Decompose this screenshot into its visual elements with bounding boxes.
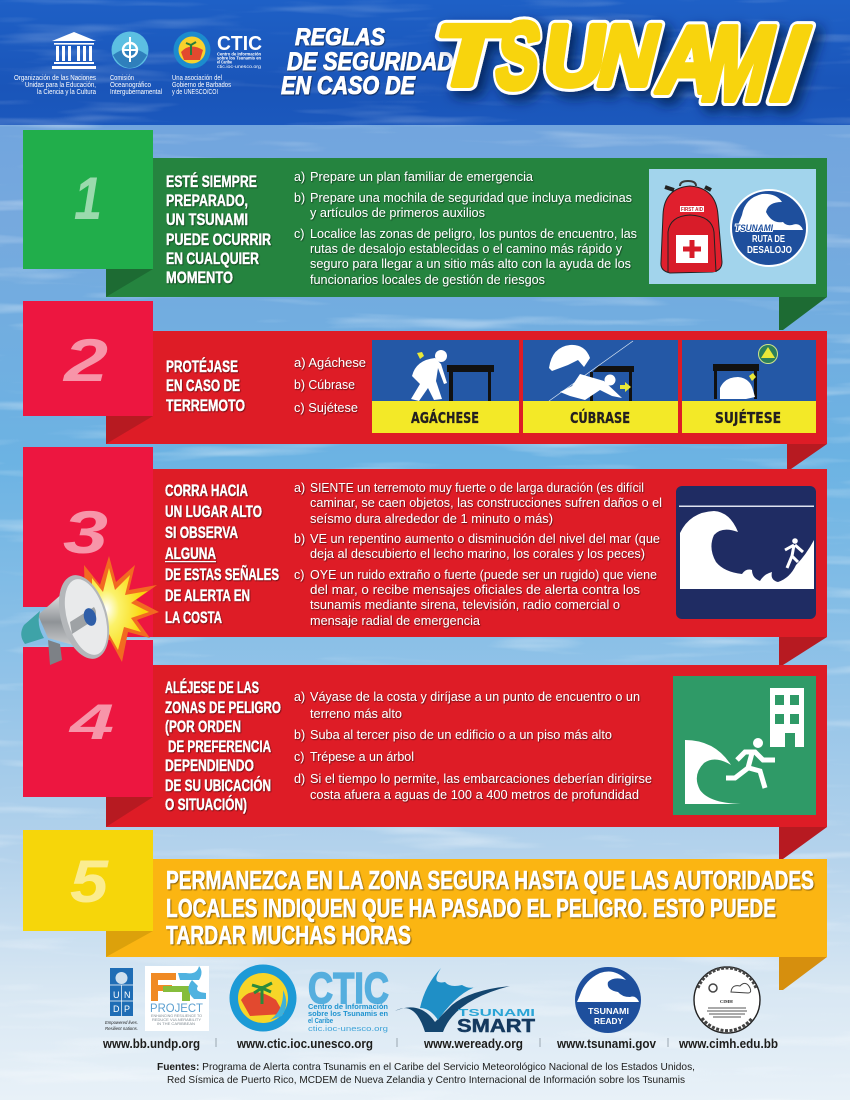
panel 3 heading: CORRA HACIA: [165, 481, 248, 500]
panel 4 heading: DE PREFERENCIA: [168, 737, 271, 756]
panel 1 list: rutas de desalojo establecidas o el camino más rápido y: [310, 242, 623, 256]
logo: CTIC wordmark: CTIC: [308, 964, 389, 1013]
panel 5: stay in safe zone: [23, 830, 827, 990]
logo: CTIC: Centro de Información: [217, 52, 261, 56]
website links: www.ctic.ioc.unesco.org: [236, 1036, 373, 1051]
logo: UNDP: [105, 968, 138, 1031]
partner logos: [105, 964, 760, 1036]
panel 4 list: c): [294, 750, 304, 764]
panel 1 list: y artículos de primeros auxilios: [310, 206, 485, 220]
sources note: Fuentes: Programa de Alerta contra Tsunamis en el Caribe del Servicio Meteorológico Nacional de los Estados Unidos,: [157, 1061, 695, 1073]
panel 4 heading: (POR ORDEN: [165, 717, 241, 736]
UNESCO caption: [14, 75, 96, 96]
panel 3 number square: 3: [63, 499, 108, 566]
website links: www.bb.undp.org: [102, 1036, 200, 1051]
megaphone with burst: [21, 556, 159, 665]
panel 3 heading: DE ESTAS SEÑALES: [165, 564, 279, 584]
panel 4: move away from danger zones: [23, 640, 827, 859]
CTIC caption: y de UNESCO/COI: [172, 89, 218, 96]
title: TSUNAMI: U: [538, 8, 612, 104]
website links: www.tsunami.gov: [556, 1036, 657, 1051]
panel 3 list: a): [294, 481, 305, 495]
CTIC caption: [172, 75, 231, 96]
panel 5 message: [166, 867, 814, 950]
panel 4 list: Suba al tercer piso de un edificio o a un piso más alto: [310, 728, 612, 742]
panel 3: run to high ground: [23, 447, 827, 665]
icon: evacuation route sign: TSUNAMI: [735, 223, 773, 233]
panel 1 list: funcionarios locales de gestión de riesgos: [310, 273, 545, 287]
panel 2: protect in earthquake: [23, 301, 827, 469]
logo: CIMH: CIMH: [720, 999, 733, 1004]
logo: Tsunami Smart: TSUNAMI: [458, 1007, 535, 1019]
hold on step card: [682, 340, 816, 433]
panel 3 banner: [153, 469, 827, 637]
panel 2 heading: PROTÉJASE: [166, 357, 238, 376]
title: TSUNAMI: N: [589, 7, 669, 104]
logo: UNDP: U: [113, 990, 120, 1000]
icon: tsunami warning sign: [676, 486, 816, 619]
panel 4 list: d): [294, 772, 305, 786]
title: TSUNAMI: I: [757, 5, 824, 123]
logo: UNDP: N: [124, 990, 130, 1000]
panel 4 heading: DEPENDIENDO: [165, 756, 254, 775]
panel 1 heading: EN CUALQUIER: [166, 249, 259, 268]
panel 4 list: terreno más alto: [310, 707, 402, 721]
panel 1 list: Prepare una mochila de seguridad que incluya medicinas: [310, 191, 632, 205]
logo: CTIC wordmark: [308, 964, 389, 1033]
logo: ERC project: ENHANCING RESILIENCE TO: [151, 1014, 202, 1018]
panel 2 list: b) Cúbrase: [294, 378, 355, 392]
panel 5 message: TARDAR MUCHAS HORAS: [166, 922, 411, 950]
panel 1 heading: PREPARADO,: [166, 191, 248, 210]
panel 3 list: deja al descubierto el lecho marino, los corales y los peces): [310, 547, 645, 561]
panel 3 list: del mar, o recibe mensajes oficiales de alerta contra los: [310, 583, 640, 597]
cone: [38, 592, 98, 652]
panel 3 heading: [165, 481, 279, 627]
COI caption: Oceanográfico: [110, 82, 151, 89]
panel 4 number square: [23, 640, 153, 797]
panel 1 list: Prepare un plan familiar de emergencia: [310, 170, 533, 184]
title: TSUNAMI: T: [424, 7, 514, 104]
logo: Tsunami Ready: TSUNAMI: [588, 1006, 629, 1016]
title: Reglas de seguridad en caso de: [281, 24, 453, 100]
icon: first aid backpack: [661, 181, 722, 273]
panel 1 list: a): [294, 170, 305, 184]
panel 3 heading: SI OBSERVA: [165, 523, 238, 542]
cover step card: [523, 340, 678, 433]
logo: CTIC wordmark: sobre los Tsunamis en: [308, 1009, 388, 1018]
logo: Comisión Oceanográfica circle: [112, 32, 148, 68]
panel 1 list: c): [294, 227, 304, 241]
logo: Tsunami Ready: [575, 967, 641, 1033]
panel 1 banner: [106, 158, 827, 297]
panel 3 number square: [23, 447, 153, 637]
logo: ERC project: [145, 966, 209, 1031]
logo: CTIC: ctic.ioc-unesco.org: [217, 64, 262, 69]
title: TSUNAMI: S: [490, 3, 547, 109]
title: Reglas de seguridad en caso de: EN CASO DE: [281, 72, 416, 100]
panel 4 number square: 4: [68, 694, 114, 750]
panel 3 list: tsunamis mediante sirena, televisión, radio comercial o: [310, 598, 620, 612]
website links: [102, 1036, 778, 1051]
panel 4 list: [294, 690, 652, 802]
panel 1 heading: PUEDE OCURRIR: [166, 230, 271, 249]
panel 4 banner: [106, 665, 827, 827]
panel 2 number square: [23, 301, 153, 416]
panel 2 banner: [106, 331, 827, 444]
panel 3 list: caminar, se caen objetos, las construcciones sufren daños o el: [310, 496, 662, 510]
logo: UNDP: Resilient nations.: [105, 1026, 138, 1031]
logo: CIMH: [694, 967, 760, 1033]
icon: evacuation route sign: DESALOJO: [747, 245, 792, 256]
title: TSUNAMI: M: [692, 4, 786, 123]
UNESCO caption: la Ciencia y la Cultura: [37, 89, 96, 96]
panel 3 heading: UN LUGAR ALTO: [165, 502, 262, 521]
panel 4 heading: [165, 678, 281, 814]
panel 4 heading: DE SU UBICACIÓN: [165, 776, 271, 795]
panel 2 heading: EN CASO DE: [166, 376, 240, 395]
sources note: [157, 1061, 695, 1086]
panel 4 list: Trépese a un árbol: [310, 750, 414, 764]
logo: CTIC wordmark: Centro de Información: [308, 1002, 388, 1011]
logo: Tsunami Ready: READY: [594, 1016, 623, 1026]
panel 4 list: b): [294, 728, 305, 742]
panel 4 heading: ALÉJESE DE LAS: [165, 678, 259, 697]
title: Reglas de seguridad en caso de: DE SEGURIDAD: [287, 48, 453, 76]
panel 3 list: seísmo dura alrededor de 1 minuto o más): [310, 512, 553, 526]
panel 1 heading: UN TSUNAMI: [166, 210, 248, 229]
title: TSUNAMI: [424, 3, 824, 123]
panel 3 list: VE un repentino aumento o disminución del nivel del mar (que: [310, 532, 660, 546]
drop step card: [372, 340, 519, 433]
panel 4 heading: O SITUACIÓN): [165, 795, 247, 814]
panel 1 list: Localice las zonas de peligro, los puntos de encuentro, las: [310, 227, 637, 241]
COI caption: Comisión: [110, 75, 134, 82]
panel 3 heading: DE ALERTA EN: [165, 586, 250, 605]
logo: CTIC wordmark: el Caribe: [308, 1016, 333, 1025]
panel 3 list: SIENTE un terremoto muy fuerte o de larga duración (es difícil: [310, 481, 644, 495]
title: TSUNAMI: A: [650, 8, 729, 113]
panel 1 number square: 1: [74, 165, 102, 232]
UNESCO caption: Unidas para la Educación,: [25, 82, 96, 89]
cover step card: CÚBRASE: [570, 408, 630, 427]
panel 1 list: seguro para llegar a un sitio más alto con la ayuda de los: [310, 257, 631, 271]
title: TSUNAMI: M: [692, 4, 786, 123]
title: TSUNAMI: A: [650, 8, 729, 113]
panel 3 list: [294, 481, 662, 628]
burst: [84, 556, 159, 662]
website links: www.cimh.edu.bb: [678, 1036, 778, 1051]
panel 3 list: c): [294, 568, 304, 582]
icon: evacuation to building sign: [673, 676, 816, 815]
panel 1 number square: [23, 130, 153, 269]
panel 3 heading: ALGUNA: [165, 544, 216, 563]
icon: evacuation route sign: RUTA DE: [752, 234, 785, 245]
title: Reglas de seguridad en caso de: REGLAS: [295, 24, 385, 51]
panel 2 heading: TERREMOTO: [166, 396, 245, 415]
panel 1 heading: [166, 172, 271, 287]
panel 4 heading: ZONAS DE PELIGRO: [165, 698, 281, 717]
logo group: UNESCO, COI, CTIC: [14, 32, 262, 96]
logo: UNESCO temple: [52, 32, 96, 69]
horn mouth: [50, 569, 118, 665]
title: TSUNAMI: S: [490, 3, 547, 109]
COI caption: Intergubernamental: [110, 89, 162, 96]
logo: ERC project: REDUCE VULNERABILITY: [152, 1018, 202, 1022]
logo: UNDP: D: [113, 1004, 120, 1014]
logo: CTIC wordmark: ctic.ioc-unesco.org: [308, 1024, 388, 1033]
panel 3 list: mensaje radial de emergencia: [310, 614, 480, 628]
panel 4 list: costa afuera a aguas de 100 a 400 metros de profundidad: [310, 788, 639, 802]
icon: first aid backpack: FIRST AID: [681, 207, 703, 213]
panel 3 heading: LA COSTA: [165, 608, 222, 627]
logo: ERC project: IN THE CARIBBEAN: [157, 1022, 195, 1026]
logo: CTIC: el Caribe: [217, 60, 233, 64]
CTIC caption: Gobierno de Barbados: [172, 82, 231, 89]
CTIC caption: Una asociación del: [172, 75, 222, 82]
logo: CTIC: CTIC: [217, 33, 262, 55]
header band: [0, 0, 850, 125]
panel 5 number square: [23, 830, 153, 931]
panel 2 heading: [166, 357, 245, 415]
panel 1 image box: [649, 169, 816, 284]
website links: www.weready.org: [423, 1036, 523, 1051]
panel 4 list: Váyase de la costa y diríjase a un punto de encuentro o un: [310, 690, 640, 704]
panel 4 list: a): [294, 690, 305, 704]
panel 1 heading: ESTÉ SIEMPRE: [166, 172, 257, 191]
panel 3 list: b): [294, 532, 305, 546]
logo: CTIC seal: [230, 964, 296, 1032]
logo: CTIC: [174, 32, 262, 69]
panel 1: always prepared: [23, 130, 827, 330]
UNESCO caption: Organización de las Naciones: [14, 75, 96, 82]
logo: UNDP: Empowered lives.: [105, 1020, 138, 1025]
panel 2 list: a) Agáchese: [294, 356, 366, 370]
panel 5 number square: 5: [70, 848, 110, 915]
panel 4 list: Si el tiempo lo permite, las embarcaciones deberían dirigirse: [310, 772, 652, 786]
sources note: Red Sísmica de Puerto Rico, MCDEM de Nueva Zelandia y Centro Internacional de Información sobre los Tsunamis: [167, 1074, 685, 1086]
title: TSUNAMI: N: [589, 7, 669, 104]
panel 2 list: [294, 356, 366, 415]
panel 2 number square: 2: [63, 327, 108, 394]
title: TSUNAMI: T: [424, 7, 514, 104]
panel 1 list: [294, 170, 637, 287]
logo: CTIC: sobre los Tsunamis en: [217, 56, 261, 60]
logo: ERC project: PROJECT: [150, 1001, 204, 1015]
hold on step card: SUJÉTESE: [715, 408, 781, 427]
logo: UNDP: P: [124, 1004, 130, 1014]
logo: Tsunami Smart: SMART: [457, 1016, 535, 1036]
panel 5 banner: [106, 859, 827, 957]
title: TSUNAMI: U: [538, 8, 612, 104]
COI caption: [110, 75, 162, 96]
panel 3 list: OYE un ruido extraño o fuerte (puede ser un rugido) que viene: [310, 568, 657, 582]
drop step card: AGÁCHESE: [411, 408, 479, 427]
logo: Tsunami Smart: [395, 968, 535, 1036]
panel 1 heading: MOMENTO: [166, 268, 233, 287]
icon: evacuation route sign: [731, 190, 807, 266]
panel 2 list: c) Sujétese: [294, 401, 358, 415]
title: TSUNAMI: I: [757, 5, 824, 123]
panel 1 list: b): [294, 191, 305, 205]
